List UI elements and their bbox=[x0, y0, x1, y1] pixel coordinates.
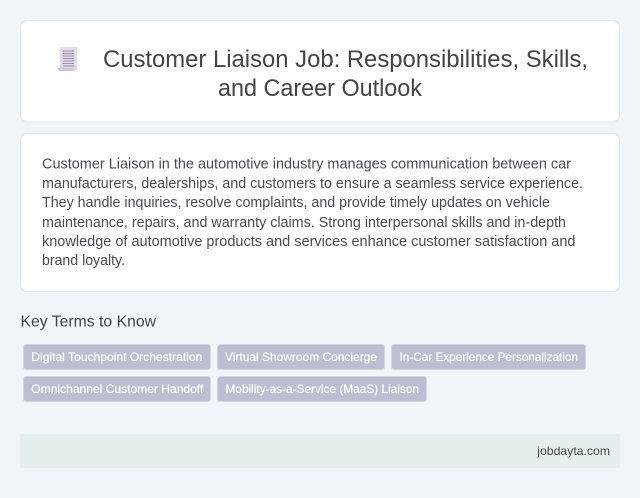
text block: description: Customer Liaison in the automotive industry manages communication between car bbox=[42, 156, 571, 172]
tag: in-car experience personalization bbox=[392, 344, 586, 370]
tag: mobility-as-a-service liaison: Mobility-as-a-Service (MaaS) Liaison bbox=[226, 382, 419, 396]
footer bar bbox=[20, 434, 620, 468]
panel: title card bbox=[20, 20, 620, 122]
tag: virtual showroom concierge bbox=[218, 344, 384, 370]
tag: virtual showroom concierge: Virtual Showroom Concierge bbox=[225, 350, 377, 364]
title: and Career Outlook bbox=[218, 75, 423, 102]
icon: document scroll bbox=[58, 47, 77, 71]
tag: mobility-as-a-service liaison bbox=[218, 376, 426, 402]
footer text: jobdayta.com bbox=[536, 444, 610, 458]
text block: description: brand loyalty. bbox=[42, 253, 125, 269]
title: Customer Liaison Job: Responsibilities, Skills, bbox=[103, 46, 588, 73]
text block: description: knowledge of automotive products and services enhance customer satisfaction and bbox=[42, 234, 576, 250]
tag: digital touchpoint orchestration: Digital Touchpoint Orchestration bbox=[31, 350, 202, 364]
text block: description: manufacturers, dealerships, and customers to ensure a seamless service experience. bbox=[42, 176, 583, 192]
tag: omnichannel customer handoff bbox=[24, 376, 210, 402]
panel: description card bbox=[20, 134, 620, 292]
heading: key terms: Key Terms to Know bbox=[20, 314, 156, 331]
tag: omnichannel customer handoff: Omnichannel Customer Handoff bbox=[31, 382, 204, 396]
tags: key terms bbox=[24, 344, 586, 402]
title bbox=[103, 46, 588, 102]
text block: description: maintenance, repairs, and warranty claims. Strong interpersonal skills and in-depth bbox=[42, 215, 566, 231]
tag: in-car experience personalization: In-Car Experience Personalization bbox=[400, 350, 578, 364]
text block: description: They handle inquiries, resolve complaints, and provide timely updates on vehicle bbox=[42, 195, 550, 211]
text block: description bbox=[42, 156, 583, 269]
tag: digital touchpoint orchestration bbox=[24, 344, 210, 370]
